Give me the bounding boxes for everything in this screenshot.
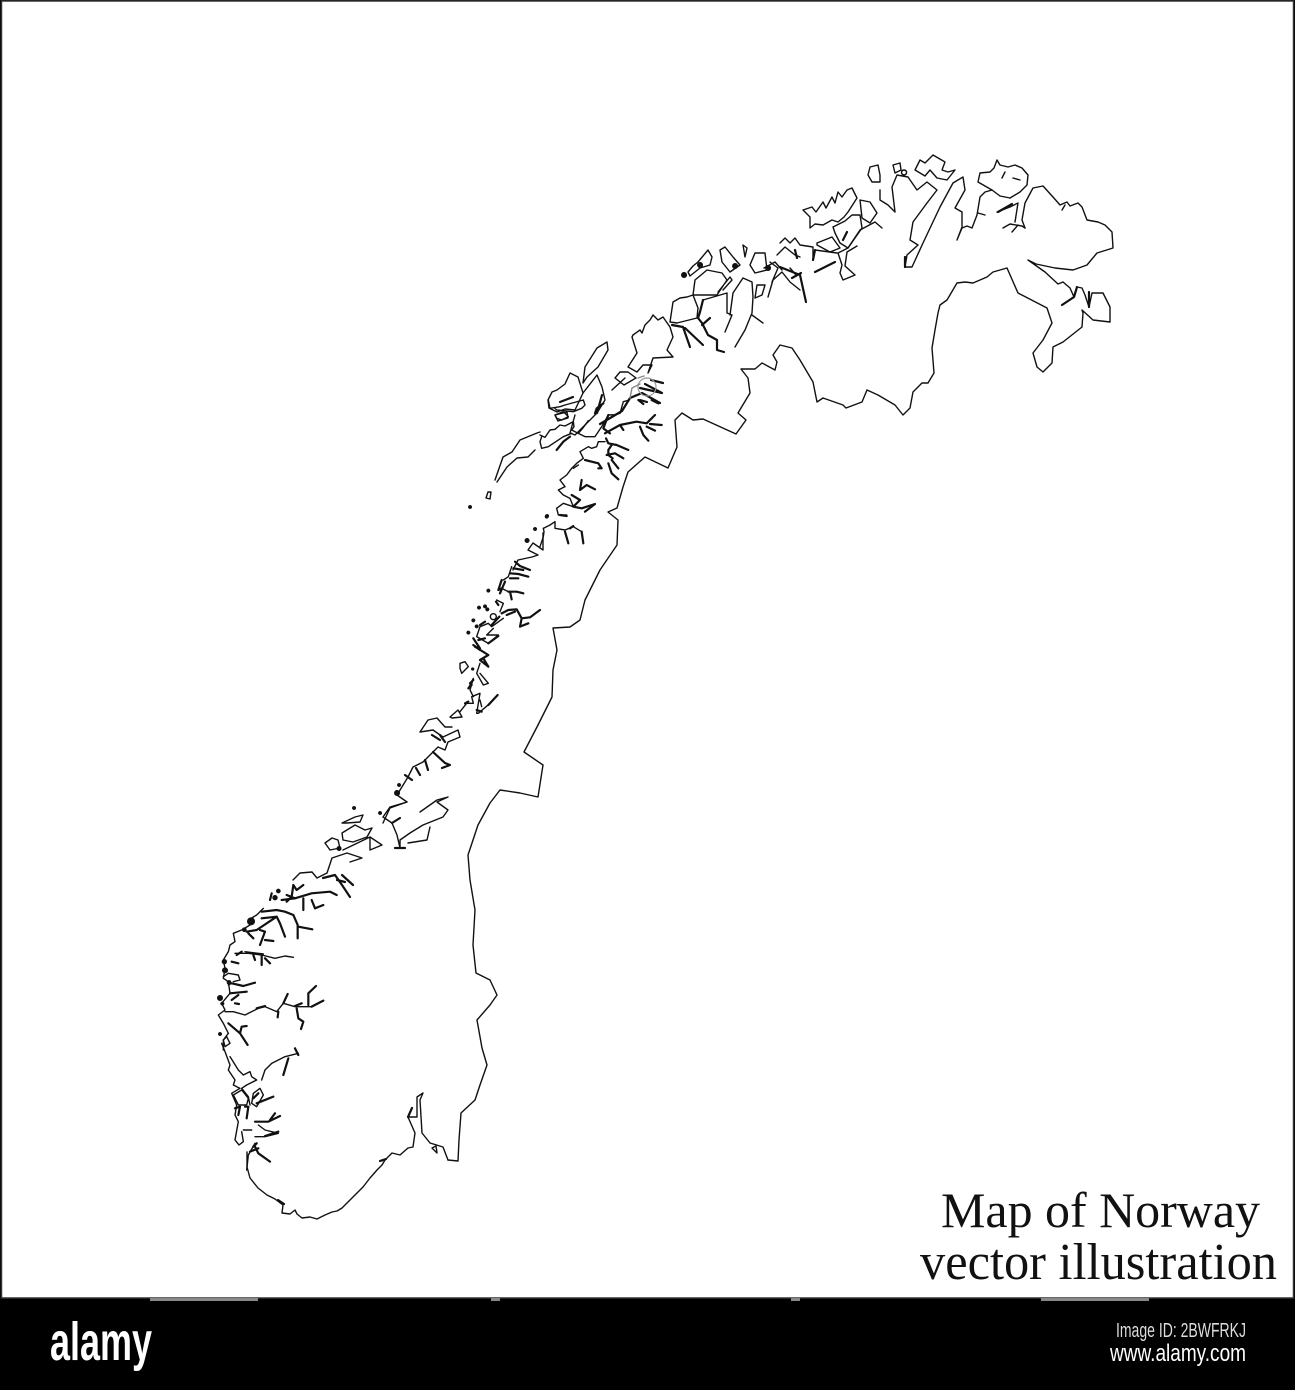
caption line 2: vector illustration xyxy=(920,1234,1277,1291)
Moere islands and coast xyxy=(293,815,382,880)
Helgeland detail, traced at 3x xyxy=(460,562,540,713)
western fjords detail, traced at 3x xyxy=(217,885,337,1050)
Ofoten and Salten grey circle area xyxy=(600,380,663,424)
alamy logo: alamy xyxy=(50,1312,152,1372)
Helgeland north xyxy=(513,533,543,570)
caption line 1: Map of Norway xyxy=(941,1182,1260,1238)
footer bar xyxy=(50,1312,1246,1372)
coastal island dots xyxy=(337,505,549,851)
Troms coast xyxy=(764,247,800,297)
south coast xyxy=(247,1093,448,1219)
Trondelag coast xyxy=(383,718,460,823)
Nordland detail, traced at 3x xyxy=(540,400,662,547)
website: www.alamy.com xyxy=(1109,1340,1246,1367)
map of Norway xyxy=(217,155,1113,1219)
caption xyxy=(920,1182,1277,1291)
Rogaland detail, traced at 3x xyxy=(222,1043,298,1170)
Finnmark fjords and peninsulas xyxy=(1062,287,1077,305)
Finnmark islands xyxy=(915,155,955,180)
land border and Finnmark coast xyxy=(448,268,1110,1161)
Vesteralen and Lofoten xyxy=(583,342,608,383)
